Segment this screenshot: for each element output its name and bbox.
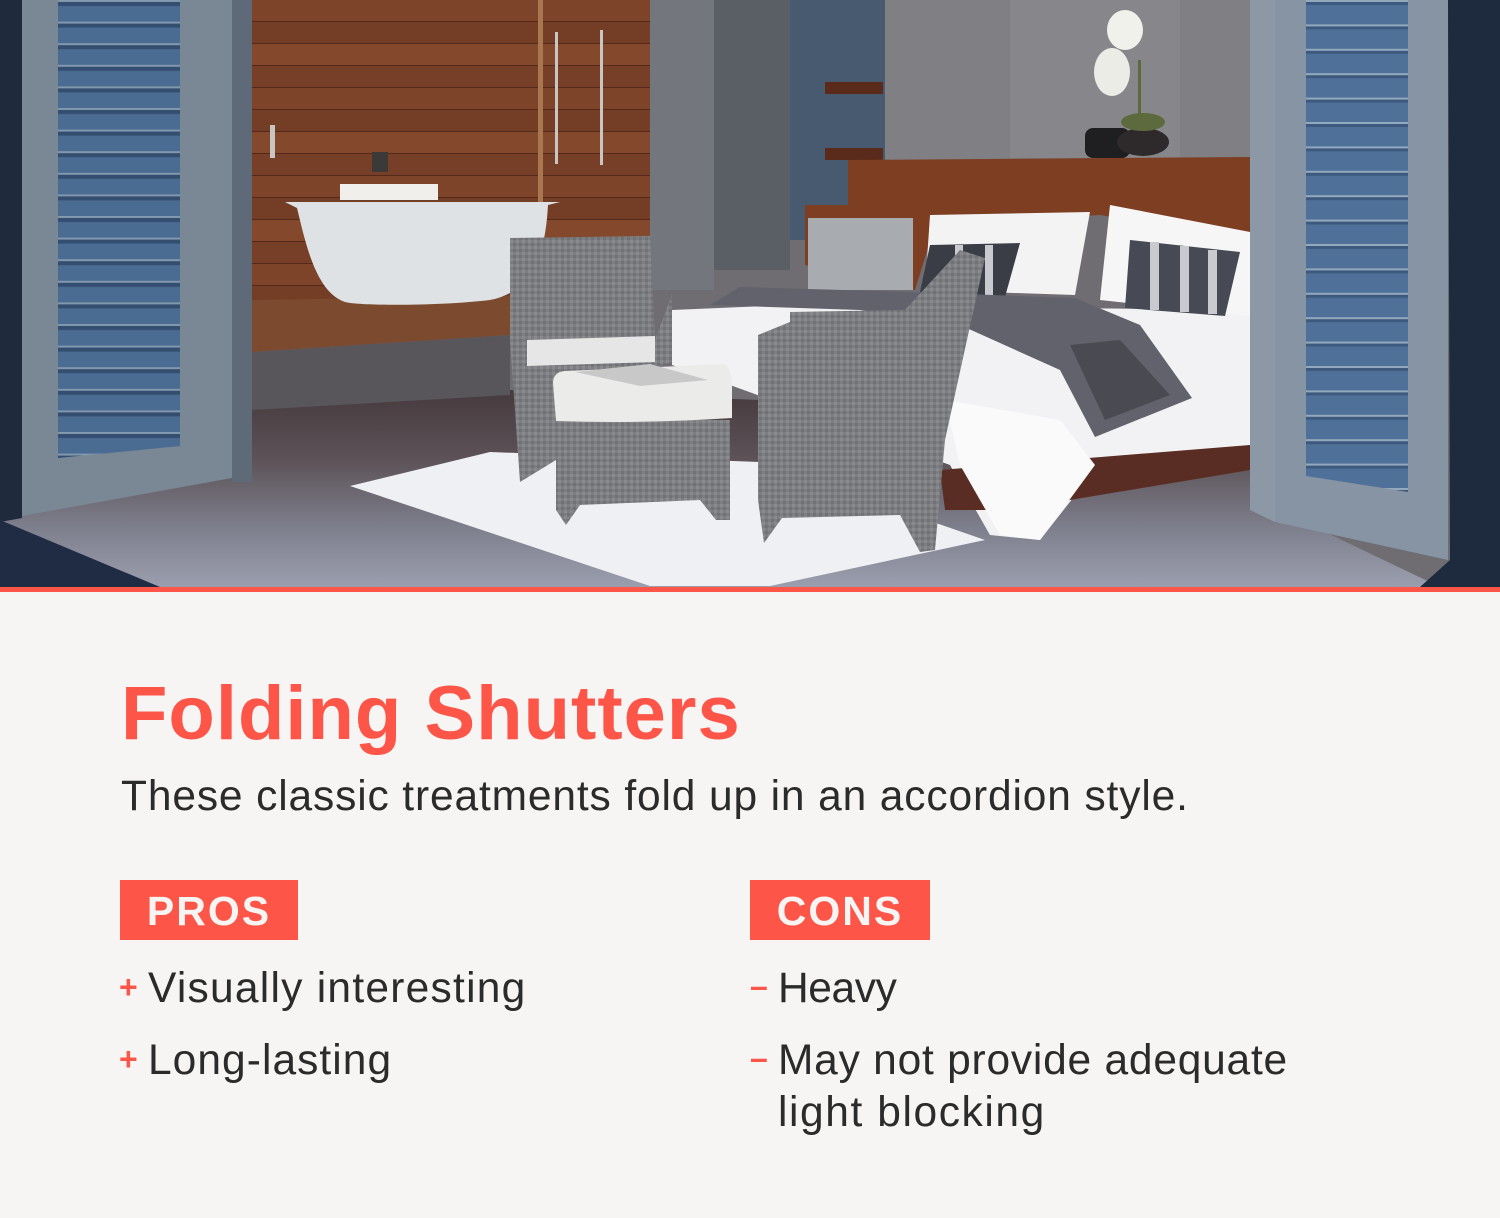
con item: light blocking: – [750, 1040, 769, 1076]
pros badge [120, 880, 298, 940]
cons badge: CONS [777, 888, 903, 934]
bathtub [285, 184, 560, 305]
con item: light blocking [750, 1037, 1288, 1136]
cons badge [750, 880, 930, 940]
subtitle: These classic treatments fold up in an accordion style. [121, 773, 1189, 820]
bed [672, 205, 1250, 540]
room background [0, 0, 1500, 587]
cons column: – [750, 968, 769, 1004]
pros column: Long-lasting [148, 1037, 392, 1084]
pro item: visually interesting [119, 965, 527, 1012]
coral divider bar [0, 587, 1500, 592]
con item: light blocking: light blocking [778, 1089, 1046, 1136]
left shutter [0, 0, 252, 522]
rug [350, 452, 985, 586]
floor [0, 390, 1440, 587]
title: Folding Shutters [121, 671, 741, 756]
pros column: Visually interesting [148, 965, 527, 1012]
armchair right [758, 250, 985, 552]
ottoman [553, 364, 732, 525]
pros column: + [119, 1041, 139, 1077]
pro item: long-lasting [119, 1037, 392, 1084]
pros badge: PROS [147, 888, 271, 934]
wooden step and plinth [252, 296, 510, 410]
cons column [750, 880, 1288, 1136]
towel rails [270, 30, 603, 172]
pros column [119, 880, 527, 1084]
right shutter [1250, 0, 1500, 587]
con item: heavy [750, 965, 897, 1012]
door sill corner [0, 520, 160, 587]
cons column: Heavy [778, 965, 896, 1012]
armchair left [510, 236, 672, 482]
headboard [805, 157, 1250, 290]
pros column: + [119, 969, 139, 1005]
con item: light blocking: May not provide adequate [778, 1037, 1288, 1084]
orchid vase [1085, 10, 1169, 158]
photo: bedroom seen through open folding shutters [0, 0, 1500, 587]
